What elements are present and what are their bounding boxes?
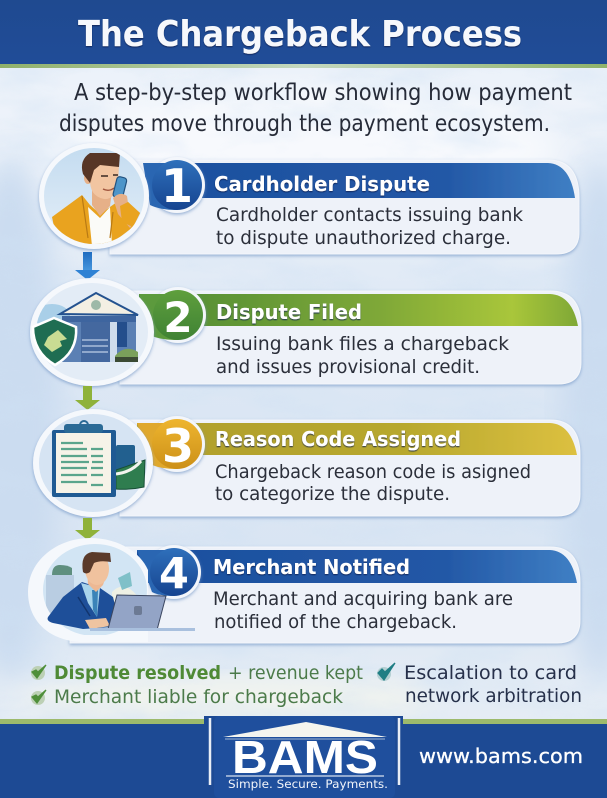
arrow: step 3 to 4 xyxy=(75,518,100,540)
step 3 card xyxy=(120,420,580,516)
number badge 2: 2 xyxy=(163,293,193,342)
logo: Simple. Secure. Payments. xyxy=(228,777,388,791)
step 2 heading: Dispute Filed xyxy=(216,300,362,324)
step 4 description: notified of the chargeback. xyxy=(214,611,457,633)
step 1 description xyxy=(216,204,523,249)
arrow: step 1 to 2 xyxy=(75,252,100,280)
footer band xyxy=(0,716,607,798)
step 2 description: and issues provisional credit. xyxy=(216,356,480,378)
number badge 1 xyxy=(143,157,205,213)
step 4 panel xyxy=(28,538,580,643)
step 1 description: to dispute unauthorized charge. xyxy=(216,227,511,249)
logo xyxy=(204,716,403,798)
step 3 description xyxy=(215,461,531,505)
intro text xyxy=(59,80,572,137)
icon: cardholder on phone xyxy=(39,143,149,249)
check: dispute resolved xyxy=(31,665,46,680)
number badge 3: 3 xyxy=(162,419,194,473)
icon: clipboard and wallet xyxy=(33,409,153,517)
step 1 heading: Cardholder Dispute xyxy=(214,172,430,196)
intro text: A step-by-step workflow showing how payment xyxy=(74,80,572,106)
step 2 description xyxy=(216,333,509,378)
step 4 heading: Merchant Notified xyxy=(213,555,410,579)
website: www.bams.com xyxy=(419,744,583,768)
number badge 1: 1 xyxy=(161,159,193,213)
step 3 heading: Reason Code Assigned xyxy=(215,427,461,451)
check: merchant liable xyxy=(31,690,46,705)
logo: BAMS xyxy=(232,731,378,783)
icon: merchant at laptop xyxy=(28,538,195,642)
outcome: escalation: network arbitration xyxy=(405,685,582,707)
outcome: dispute resolved: Dispute resolved xyxy=(54,662,221,684)
number badge 3 xyxy=(137,416,205,473)
outcome: revenue kept: + revenue kept xyxy=(228,662,363,684)
step 3 description: to categorize the dispute. xyxy=(215,483,450,505)
step 4 description: Merchant and acquiring bank are xyxy=(213,588,513,610)
header band xyxy=(0,0,607,68)
step 1 description: Cardholder contacts issuing bank xyxy=(216,204,523,226)
intro text: disputes move through the payment ecosystem. xyxy=(59,111,550,137)
step 2 panel xyxy=(30,278,581,386)
number badge 4 xyxy=(137,545,201,599)
outcome: merchant liable: Merchant liable for chargeback xyxy=(54,686,343,708)
step 1 card xyxy=(110,160,579,254)
check: escalation xyxy=(377,663,395,681)
title: The Chargeback Process xyxy=(78,14,522,55)
outcome: escalation: Escalation to card xyxy=(404,662,577,684)
number badge 4: 4 xyxy=(159,549,189,599)
outcome: escalation xyxy=(404,662,582,707)
step 4 description xyxy=(213,588,513,633)
outcomes list xyxy=(31,662,582,708)
step 2 description: Issuing bank files a chargeback xyxy=(216,333,509,355)
icon: bank with shield xyxy=(30,278,154,386)
step 3 panel xyxy=(33,409,580,517)
step 4 card xyxy=(70,547,580,643)
number badge 2 xyxy=(139,287,206,343)
step 2 card xyxy=(120,291,581,384)
step 3 description: Chargeback reason code is asigned xyxy=(215,461,531,483)
arrow: step 2 to 3 xyxy=(75,386,100,410)
step 1 panel xyxy=(39,143,579,254)
